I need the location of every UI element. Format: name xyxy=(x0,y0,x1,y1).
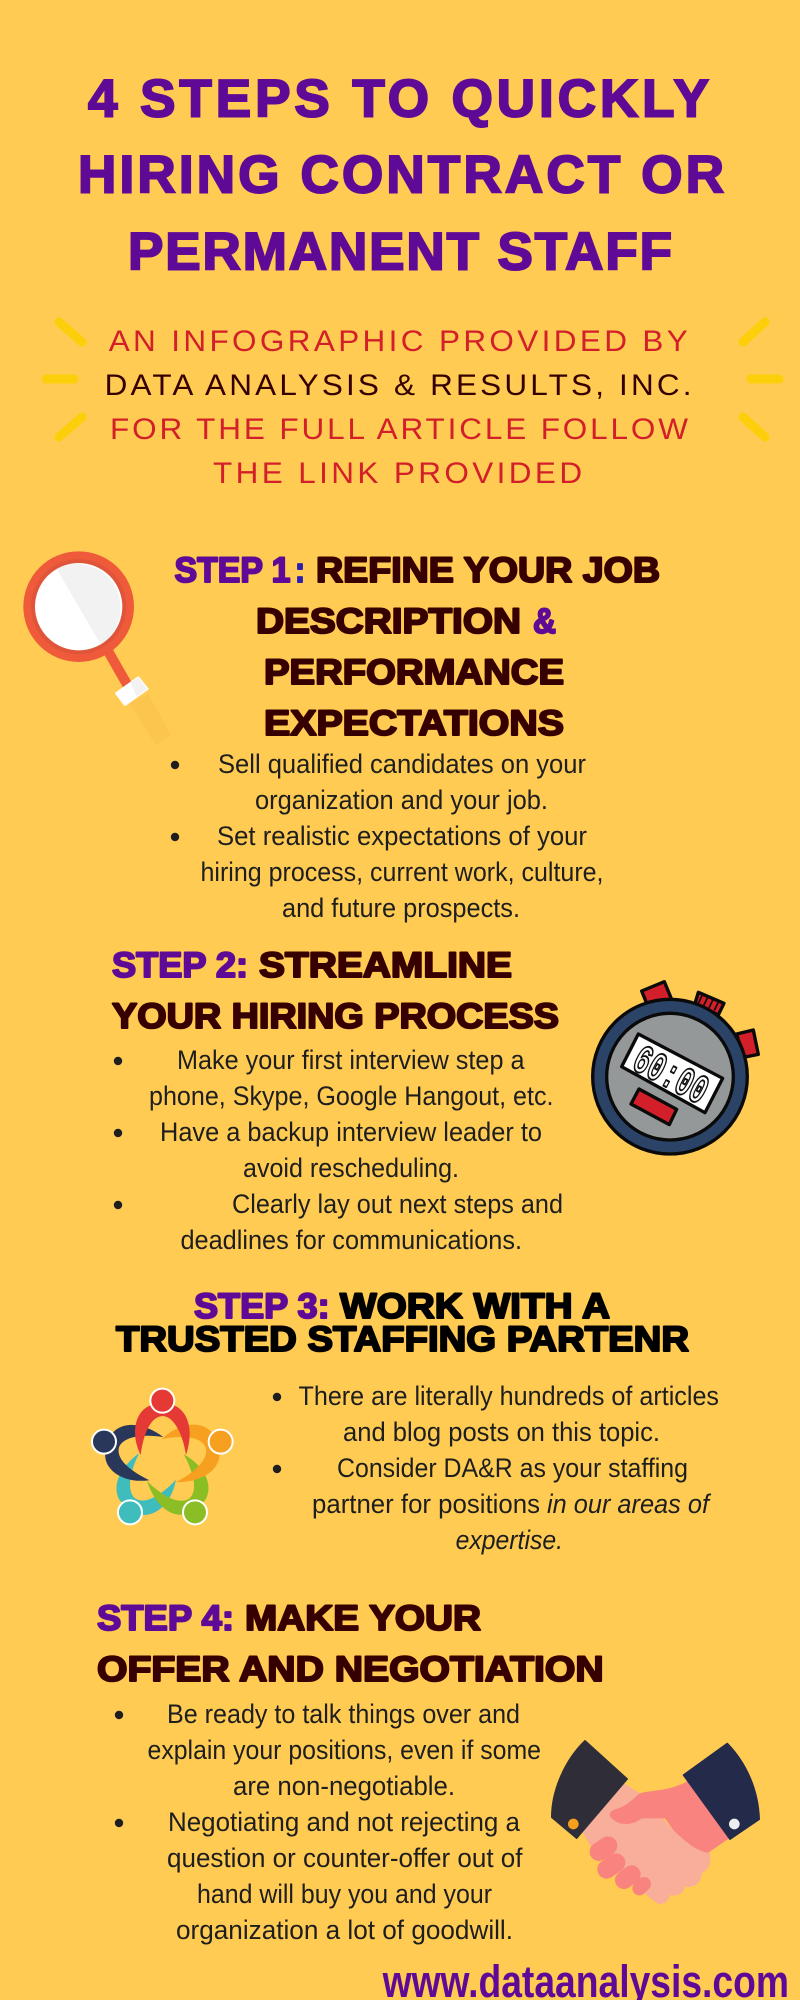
step 4 bullet list: Be ready to talk things over and xyxy=(167,1699,520,1729)
subtitle: DATA ANALYSIS & RESULTS, INC. xyxy=(105,368,692,402)
subtitle: AN INFOGRAPHIC PROVIDED BY xyxy=(109,324,688,358)
step 2 bullet list: Have a backup interview leader to xyxy=(160,1117,542,1147)
title xyxy=(78,70,724,282)
step 2 bullet list: phone, Skype, Google Hangout, etc. xyxy=(149,1081,554,1111)
step 1 heading: STEP 1 xyxy=(174,550,290,590)
step 3 heading: STEP 3: xyxy=(194,1286,330,1326)
step 3 heading: WORK WITH A xyxy=(340,1286,610,1326)
step 1 heading: EXPECTATIONS xyxy=(264,703,564,743)
panel: step 4 xyxy=(97,1598,759,1945)
step 1 heading: DESCRIPTION xyxy=(256,601,521,641)
icon: magnifying glass xyxy=(23,551,171,745)
step 1 heading: PERFORMANCE xyxy=(264,652,564,692)
subtitle: THE LINK PROVIDED xyxy=(213,456,582,490)
step 1 bullet list: and future prospects. xyxy=(282,893,520,923)
step 4 bullet list: explain your positions, even if some xyxy=(148,1735,541,1765)
sunburst rays: left xyxy=(46,322,82,437)
step 3 bullet list: expertise. xyxy=(456,1525,563,1555)
step 2 bullet list xyxy=(114,1045,563,1255)
panel: step 3 xyxy=(92,1286,719,1555)
step 1 bullet list: organization and your job. xyxy=(255,785,548,815)
step 2 heading: YOUR HIRING PROCESS xyxy=(112,996,559,1036)
step 4 bullet list: are non-negotiable. xyxy=(233,1771,455,1801)
step 4 bullet list: hand will buy you and your xyxy=(197,1879,492,1909)
step 4 bullet list: Negotiating and not rejecting a xyxy=(168,1807,521,1837)
subtitle: FOR THE FULL ARTICLE FOLLOW xyxy=(110,412,688,446)
step 4 bullet list: question or counter-offer out of xyxy=(167,1843,523,1873)
panel: step 1 xyxy=(23,550,660,923)
step 4 heading: STEP 4: xyxy=(97,1598,234,1638)
step 1 bullet list: Sell qualified candidates on your xyxy=(218,749,586,779)
step 2 heading: STEP 2: xyxy=(112,945,248,985)
step 4 bullet list: organization a lot of goodwill. xyxy=(176,1915,513,1945)
title: 4 STEPS TO QUICKLY xyxy=(88,70,709,128)
step 2 bullet list: avoid rescheduling. xyxy=(243,1153,459,1183)
icon: stopwatch: 60:00 xyxy=(624,1039,715,1116)
title: HIRING CONTRACT OR xyxy=(78,146,724,204)
step 2 heading: STREAMLINE xyxy=(259,945,512,985)
step 1 bullet list xyxy=(171,749,604,923)
icon: stopwatch xyxy=(593,982,758,1154)
step 1 heading: & xyxy=(533,601,556,641)
step 3 heading xyxy=(116,1286,689,1359)
step 3 bullet list: There are literally hundreds of articles xyxy=(298,1381,719,1411)
step 4 heading: OFFER AND NEGOTIATION xyxy=(97,1649,604,1689)
step 3 bullet list: partner for positions xyxy=(312,1489,540,1519)
step 2 bullet list: Make your first interview step a xyxy=(177,1045,525,1075)
subtitle xyxy=(105,324,692,490)
step 4 heading xyxy=(97,1598,604,1689)
step 3 heading: TRUSTED STAFFING PARTENR xyxy=(116,1319,689,1359)
step 1 bullet list: hiring process, current work, culture, xyxy=(200,857,604,887)
step 4 bullet list xyxy=(115,1699,541,1945)
step 2 bullet list: Clearly lay out next steps and xyxy=(232,1189,563,1219)
step 1 heading: : xyxy=(295,550,305,590)
step 2 bullet list: deadlines for communications. xyxy=(180,1225,522,1255)
step 2 heading xyxy=(112,945,559,1036)
icon: team circle xyxy=(92,1389,233,1524)
step 3 bullet list: Consider DA&R as your staffing xyxy=(337,1453,688,1483)
step 1 heading: REFINE YOUR JOB xyxy=(316,550,660,590)
step 3 bullet list: in our areas of xyxy=(547,1489,711,1519)
panel: step 2 xyxy=(112,945,758,1255)
sunburst rays: right xyxy=(743,322,779,437)
step 4 heading: MAKE YOUR xyxy=(245,1598,481,1638)
step 3 bullet list: and blog posts on this topic. xyxy=(343,1417,660,1447)
step 1 heading xyxy=(174,550,660,743)
title: PERMANENT STAFF xyxy=(128,222,672,282)
step 1 bullet list: Set realistic expectations of your xyxy=(217,821,587,851)
icon: handshake xyxy=(552,1741,759,1904)
step 3 bullet list xyxy=(273,1381,719,1555)
